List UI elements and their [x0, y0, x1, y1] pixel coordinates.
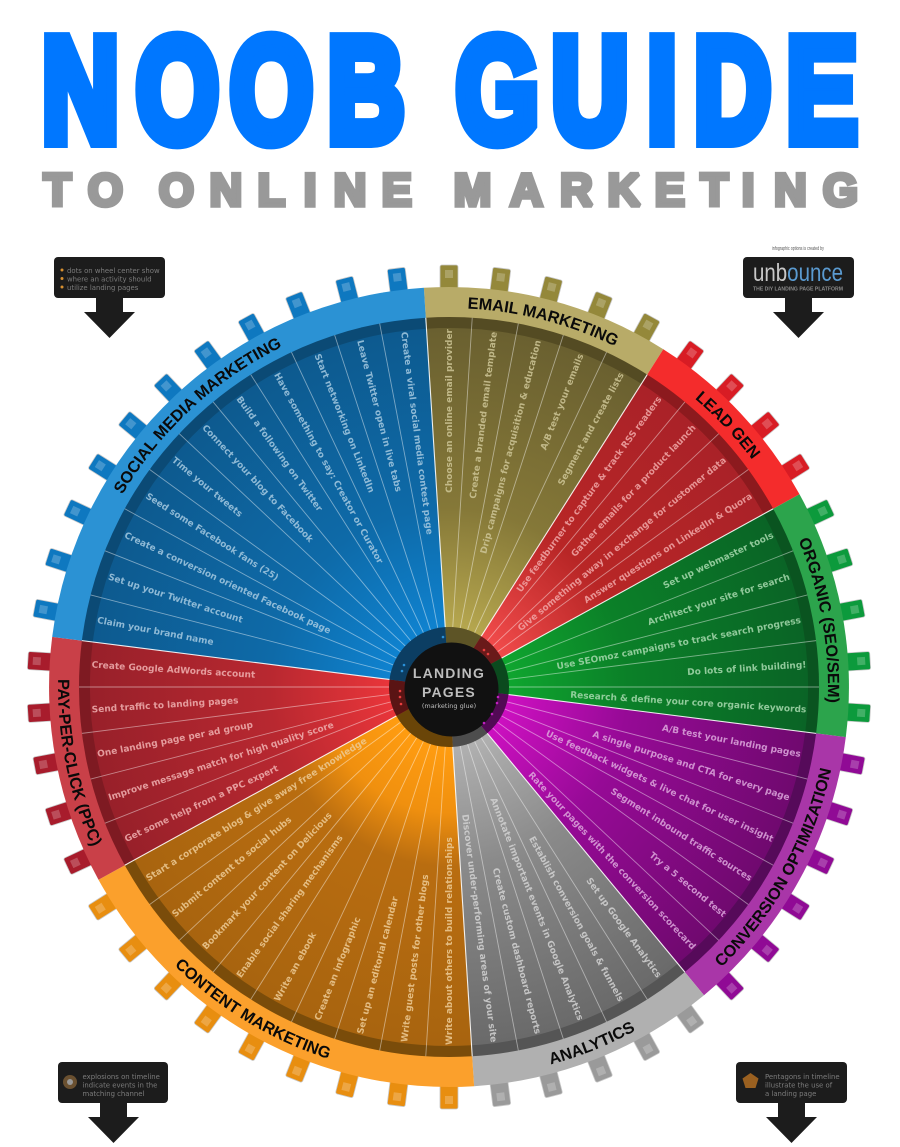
activities: pay-per-click: Get some help from a PPC expert [123, 764, 281, 845]
icon: explosion [63, 1075, 77, 1089]
activities: analytics: Create custom dashboard reports [490, 867, 542, 1035]
activities: social media marketing: Set up your Twitter account [107, 573, 244, 626]
activities: social media marketing: Start networking on LinkedIn [312, 353, 376, 494]
activities: social media marketing: Build a following on Twitter [234, 395, 324, 514]
sector: conversion optimization [483, 693, 866, 1000]
callout: explosions on timeline [58, 1062, 168, 1143]
activities: content marketing [145, 736, 455, 1045]
activities: content marketing: Write guest posts for other blogs [400, 874, 431, 1043]
activities: organic: Set up webmaster tools [662, 531, 775, 591]
activities: lead gen: Give something away in exchange for customer data [516, 456, 729, 634]
activities: social media marketing [96, 331, 434, 648]
activities: social media marketing: Seed some Facebook fans (25) [144, 492, 280, 583]
activities: email marketing: Segment and create lists [557, 371, 627, 488]
activities: organic [556, 531, 807, 715]
activities: organic: Do lots of link building! [687, 661, 807, 678]
activities: pay-per-click: Create Google AdWords account [91, 661, 256, 681]
activities: analytics [459, 797, 663, 1043]
activities: lead gen: Gather emails for a product launch [570, 423, 698, 559]
sector: content marketing [88, 709, 474, 1110]
wheel [27, 264, 871, 1134]
callout: unbounce logo: THE DIY LANDING PAGE PLATFORM [753, 286, 843, 292]
hub: landing pages: PAGES [422, 684, 476, 700]
band label: email marketing: EMAIL MARKETING [468, 297, 618, 345]
activities: content marketing: Write an ebook [273, 930, 320, 1004]
activities: content marketing: Set up an editorial calendar [356, 895, 401, 1035]
callout: unbounce logo [743, 246, 854, 338]
activities: social media marketing: Have something to say: Creator or Curator [271, 371, 385, 566]
activities: conversion optimization: Use feedback widgets & live chat for user insight [544, 729, 775, 845]
callout: pentagons in timeline: a landing page [765, 1090, 816, 1098]
tabs: lead gen [676, 340, 810, 481]
subtitle: to online marketing: TO ONLINE MARKETING [44, 164, 858, 216]
activities: pay-per-click: One landing page per ad group [97, 720, 254, 760]
activities: analytics: Annotate important events in Google Analytics [487, 797, 585, 1022]
activities: content marketing: Enable social sharing mechanisms [235, 834, 346, 980]
activities: analytics: Establish conversion goals & funnels [526, 835, 625, 1004]
activities: conversion optimization: A/B test your landing pages [661, 724, 801, 760]
tabs: email marketing [440, 265, 660, 343]
activities: social media marketing: Claim your brand name [96, 616, 214, 648]
callout: pentagons in timeline: Pentagons in timeline [765, 1073, 840, 1081]
sector: pay-per-click [27, 636, 408, 880]
activities: social media marketing: Create a conversion oriented Facebook page [123, 531, 332, 637]
activities: social media marketing: Create a viral social media contest page [398, 331, 434, 535]
activities: email marketing: Choose an online email provider [445, 328, 455, 493]
activities: content marketing: Create an infographic [313, 916, 363, 1022]
activities: conversion optimization: Rate your pages with the conversion scorecard [526, 771, 697, 952]
callout: explosions on timeline: indicate events in the [82, 1082, 157, 1090]
band label: social media marketing: SOCIAL MEDIA MARKETING [114, 338, 280, 493]
sector: social media marketing [32, 267, 446, 682]
activities: organic: Use SEOmoz campaigns to track search progress [556, 616, 802, 672]
callout: dots on wheel center: utilize landing pages [67, 284, 139, 292]
callout: unbounce logo: unbounce [753, 259, 843, 287]
activities: email marketing: A/B test your emails [539, 353, 586, 452]
band label: lead gen: LEAD GEN [696, 390, 760, 459]
activities: social media marketing: Leave Twitter open in live tabs [354, 339, 403, 493]
activities: pay-per-click: Improve message match for high quality score [107, 721, 335, 803]
callout: explosions on timeline: explosions on timeline [82, 1073, 160, 1081]
band label: pay-per-click: PAY-PER-CLICK (PPC) [58, 680, 102, 846]
callout: unbounce logo: infographic options is created by [772, 246, 824, 252]
tabs: pay-per-click [27, 652, 93, 875]
icon: pentagon [742, 1073, 758, 1088]
band label: conversion optimization: CONVERSION OPTIMIZATION [716, 768, 831, 965]
band label: content marketing: CONTENT MARKETING [176, 960, 330, 1058]
callout: pentagons in timeline [736, 1062, 847, 1143]
activities: analytics: Set up Google Analytics [583, 876, 663, 980]
activities: organic: Architect your site for search [647, 573, 791, 628]
tabs: organic [805, 499, 871, 722]
activities: conversion optimization [526, 724, 801, 952]
tabs: analytics [490, 1004, 704, 1107]
tabs: social media marketing [33, 267, 408, 621]
sector: email marketing [424, 264, 664, 648]
callout: explosions on timeline: matching channel [82, 1090, 144, 1098]
sector: organic [491, 494, 871, 738]
callout: dots on wheel center: dots on wheel center show [67, 267, 160, 275]
sector: lead gen [474, 340, 810, 663]
activities: lead gen: Answer questions on LinkedIn & Quora [582, 492, 754, 606]
activities: conversion optimization: A single purpose and CTA for every page [591, 730, 791, 803]
callout: dots on wheel center [54, 257, 165, 338]
tabs: conversion optimization [715, 753, 865, 1001]
hub: landing pages [389, 627, 509, 747]
activities: email marketing: Create a branded email template [469, 331, 500, 499]
callout: dots on wheel center: where an activity should [67, 276, 152, 284]
activities: lead gen [515, 395, 754, 634]
activities: social media marketing: Connect your blog to Facebook [200, 423, 315, 546]
activities: lead gen: Use feedburner to capture & track RSS readers [515, 395, 664, 595]
activities: content marketing: Submit content to social hubs [171, 815, 294, 920]
band label: analytics: ANALYTICS [551, 1022, 634, 1064]
activities: email marketing: Drip campaigns for acquisition & education [479, 339, 544, 555]
activities: organic: Research & define your core organic keywords [570, 691, 807, 715]
callout: pentagons in timeline: illustrate the use of [765, 1082, 833, 1090]
activities: conversion optimization: Segment inbound traffic sources [608, 787, 753, 884]
activities: pay-per-click: Send traffic to landing pages [91, 696, 239, 715]
title: NOOB GUIDE: NOOB GUIDE [42, 8, 857, 173]
hub: landing pages: LANDING [413, 665, 485, 681]
activities: email marketing [445, 328, 627, 555]
activities: pay-per-click [91, 661, 335, 845]
activities: analytics: Discover under-performing areas of your site [459, 814, 498, 1043]
tabs: content marketing [88, 893, 458, 1109]
band label: organic: ORGANIC (SEO/SEM) [800, 538, 840, 702]
activities: content marketing: Start a corporate blog & give away free knowledge [145, 736, 369, 884]
activities: content marketing: Write about others to build relationships [445, 837, 455, 1045]
activities: conversion optimization: Try a 5 second test [647, 851, 728, 920]
activities: content marketing: Bookmark your content on Delicious [201, 811, 334, 952]
hub: landing pages: (marketing glue) [422, 702, 476, 710]
sector: analytics [452, 726, 704, 1107]
activities: social media marketing: Time your tweets [169, 456, 244, 520]
